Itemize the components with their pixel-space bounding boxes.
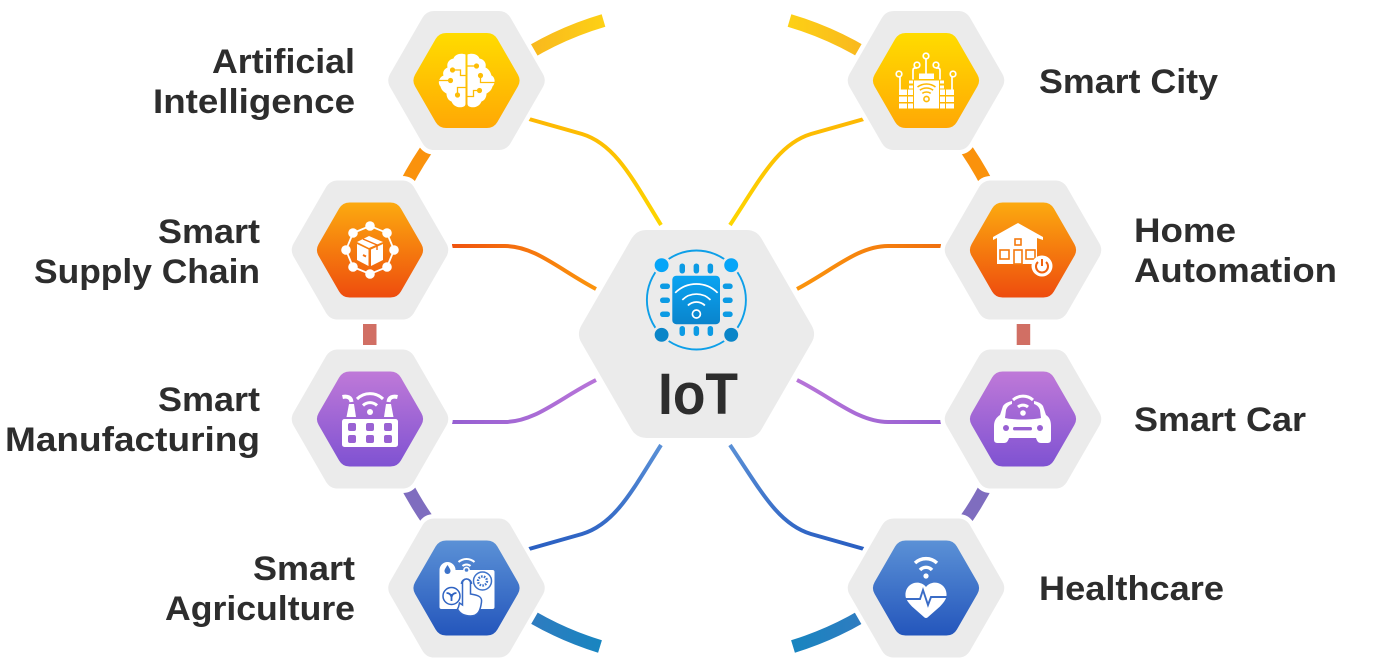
- icon: smart farming touch panel: [440, 559, 494, 616]
- label: home automation: [1134, 212, 1337, 290]
- heading: IoT: IoT: [658, 362, 738, 427]
- icon: connected city: [896, 53, 956, 108]
- icon: wireless microchip: [647, 250, 746, 350]
- arc: bottom right blue: [793, 596, 892, 646]
- connector line: smart agriculture: [529, 445, 661, 549]
- connector line: artificial intelligence: [529, 119, 661, 225]
- label: smart manufacturing: Manufacturing: [5, 421, 260, 459]
- node: healthcare: [848, 518, 1004, 658]
- icon: brain: [438, 54, 495, 107]
- label: smart city: Smart City: [1039, 63, 1218, 101]
- connector line: home automation: [797, 246, 941, 289]
- icon: smart house with power button: [993, 223, 1052, 276]
- label: home automation: Home: [1134, 212, 1236, 250]
- node: smart agriculture: [388, 518, 545, 658]
- connector line: smart supply chain: [452, 246, 596, 289]
- icon: heart with pulse and wifi: [905, 559, 947, 618]
- node: home automation: [945, 180, 1101, 320]
- label: smart car: Smart Car: [1134, 401, 1306, 439]
- arc: top left yellow: [500, 20, 604, 72]
- label: smart manufacturing: Smart: [158, 381, 260, 419]
- label: smart manufacturing: [5, 381, 260, 459]
- connector line: healthcare: [730, 445, 864, 549]
- arc: top right yellow: [790, 20, 892, 72]
- arc: bottom left blue: [500, 596, 600, 646]
- connector line: smart city: [730, 119, 864, 225]
- icon: wireless factory: [342, 394, 398, 447]
- label: smart agriculture: Agriculture: [165, 590, 355, 628]
- label: artificial intelligence: [153, 43, 355, 121]
- label: smart agriculture: [165, 550, 355, 628]
- node: smart car: [945, 350, 1101, 488]
- node: smart city: [848, 11, 1004, 150]
- icon: connected car: [994, 396, 1051, 443]
- connector: right red bar: [1017, 323, 1030, 346]
- label: smart agriculture: Smart: [253, 550, 355, 588]
- panel: central IoT hub: [579, 230, 814, 438]
- arc: right purple: [952, 448, 1003, 538]
- arc: left purple: [390, 448, 441, 538]
- node: smart supply chain: [292, 180, 448, 320]
- label: healthcare: Healthcare: [1039, 570, 1224, 608]
- arc: right orange: [952, 130, 1003, 220]
- node: artificial intelligence: [388, 11, 545, 150]
- connector: left red bar: [363, 323, 376, 346]
- node: smart manufacturing: [292, 350, 448, 488]
- label: smart supply chain: Supply Chain: [34, 253, 260, 291]
- label: artificial intelligence: Artificial: [212, 43, 355, 81]
- connector line: smart manufacturing: [452, 380, 596, 422]
- connector line: smart car: [797, 380, 941, 422]
- label: artificial intelligence: Intelligence: [153, 83, 355, 121]
- label: home automation: Automation: [1134, 252, 1337, 290]
- icon: package network: [341, 221, 399, 279]
- arc: left orange: [390, 130, 441, 220]
- label: smart supply chain: Smart: [158, 213, 260, 251]
- label: smart supply chain: [34, 213, 260, 291]
